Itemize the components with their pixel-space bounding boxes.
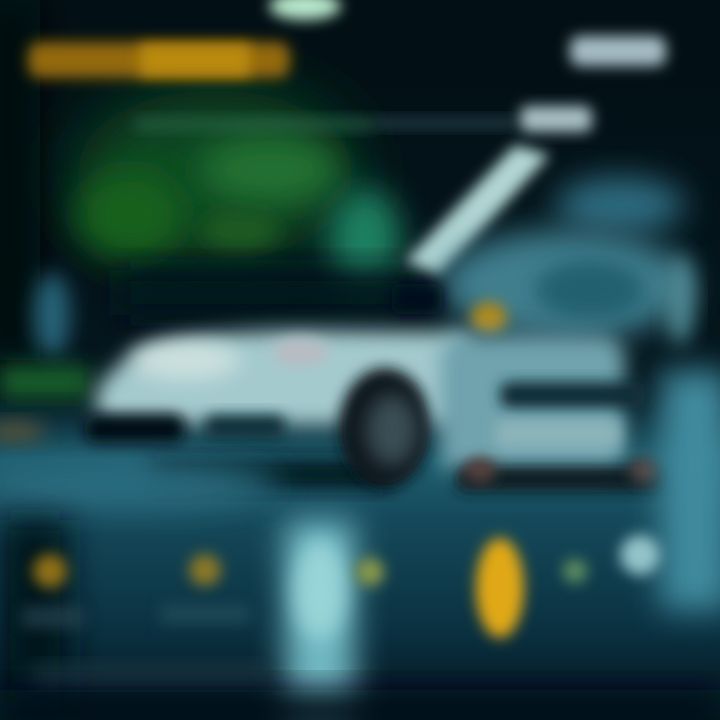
- top badge: [269, 0, 341, 20]
- subtitle: [135, 117, 515, 131]
- right side glow: [660, 370, 720, 610]
- title: [28, 42, 290, 78]
- footer text: [30, 665, 270, 683]
- icon: highlighted yellow marker: [476, 538, 524, 638]
- road reflection: [0, 460, 720, 720]
- car: left body: [85, 330, 470, 488]
- icon: white marker: [620, 535, 660, 575]
- icon: first marker: [33, 554, 67, 588]
- arrow: callout pointer: [405, 145, 550, 275]
- icon row: [33, 535, 660, 638]
- car: right body: [440, 335, 665, 492]
- top-right label: [570, 36, 666, 66]
- car: front wheel: [339, 368, 431, 488]
- callout label: [520, 106, 592, 132]
- icon captions: [22, 604, 250, 628]
- foliage backdrop: [0, 90, 410, 442]
- engine graphic: [392, 177, 694, 345]
- icon: fourth marker: [563, 559, 587, 583]
- icon: third marker: [356, 558, 384, 586]
- icon: second marker: [189, 554, 221, 586]
